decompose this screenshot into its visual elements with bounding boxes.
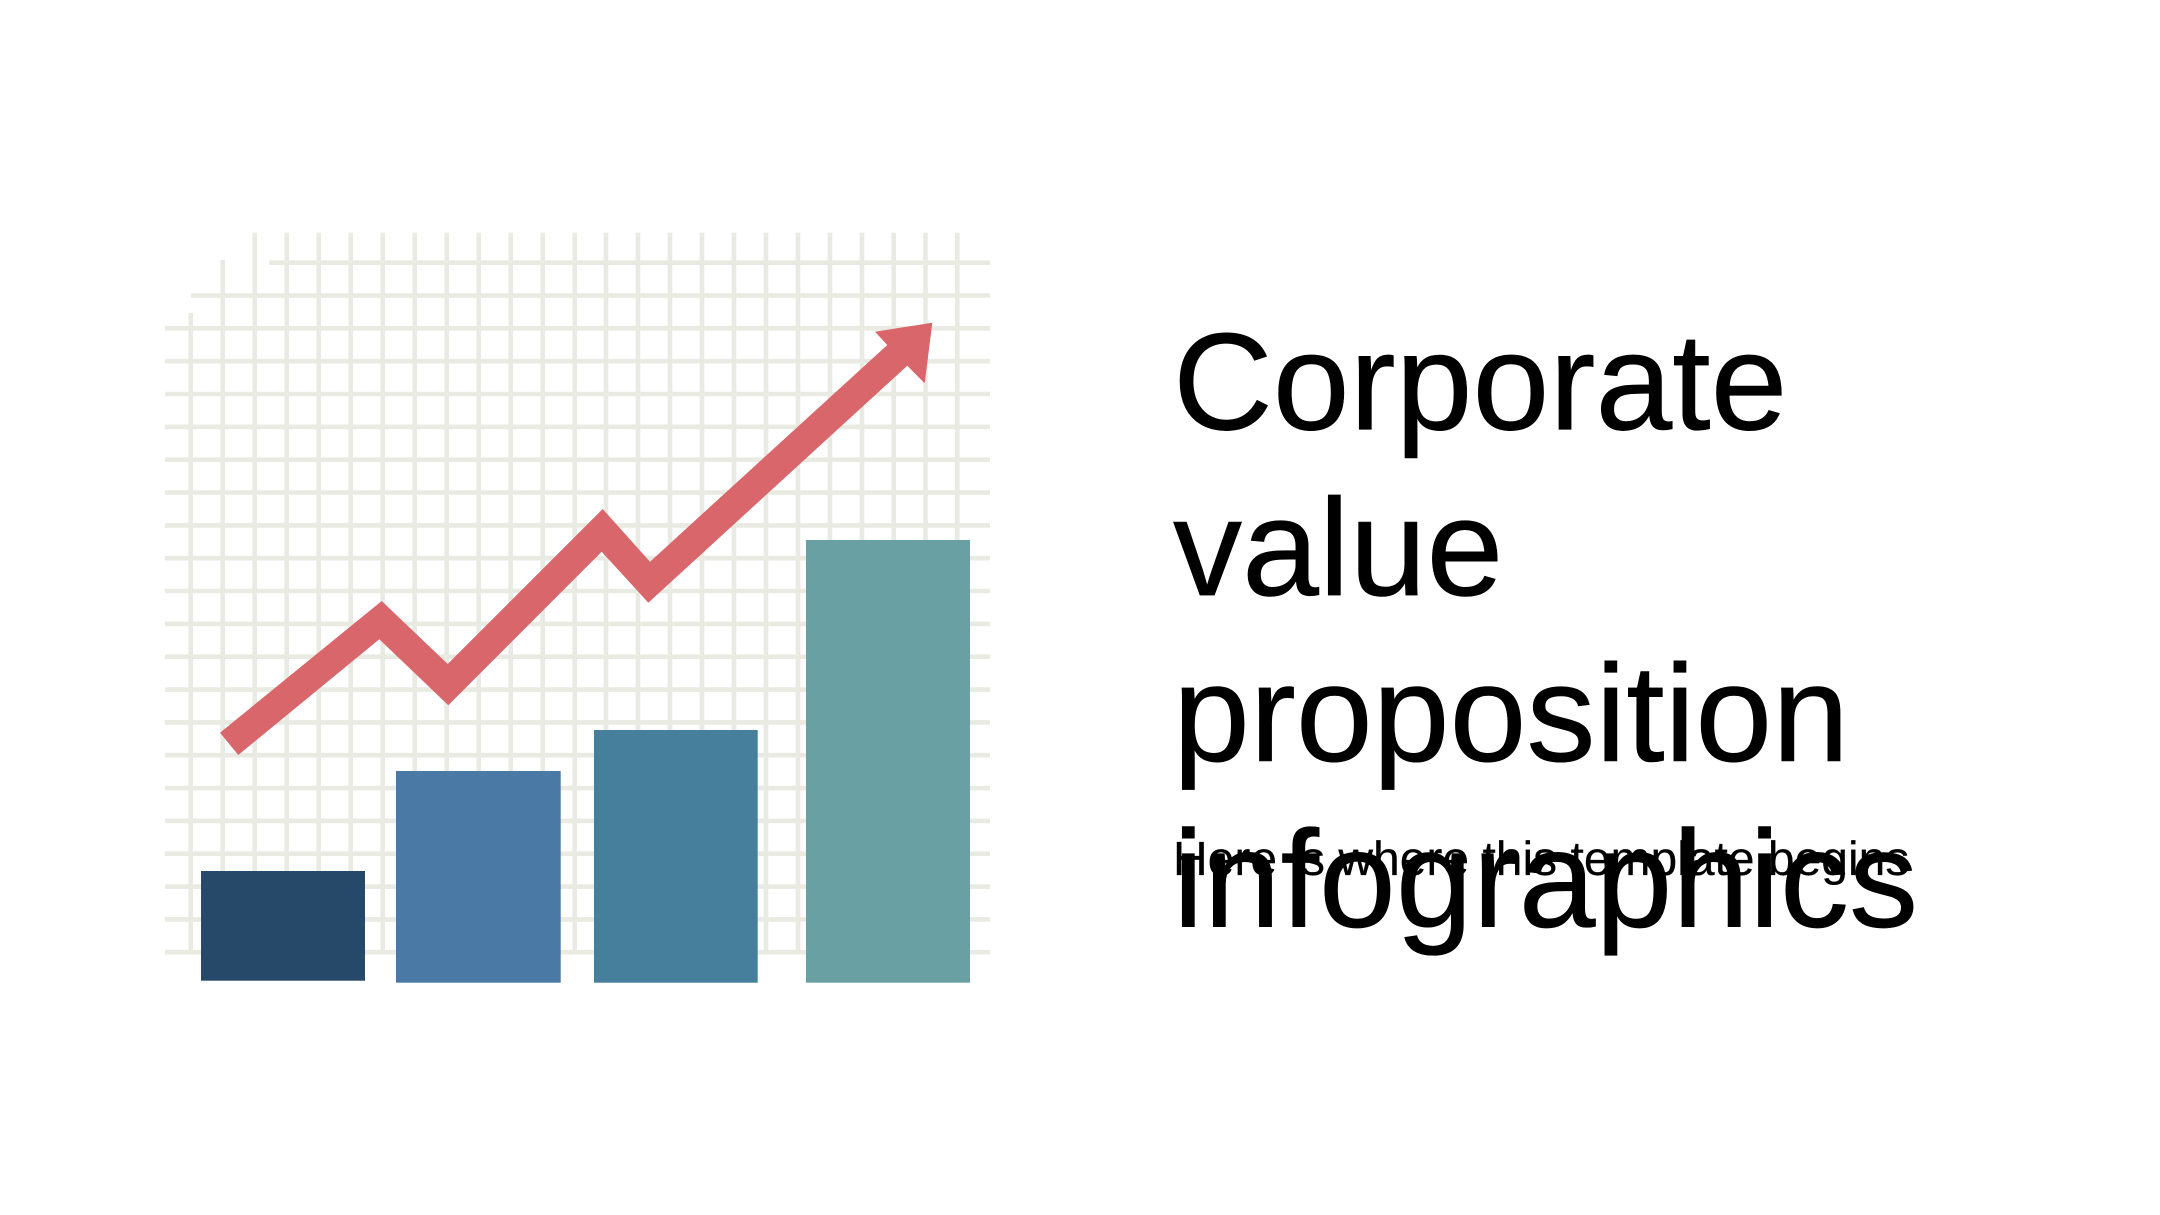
title: infographics [1173,803,1918,957]
bar 4 [806,540,970,983]
grid background [165,233,990,952]
title: Corporate [1173,305,1788,459]
chart illustration [165,233,990,983]
bar 2 [396,771,561,983]
title: proposition [1173,637,1849,791]
title: value [1173,471,1503,625]
bar 1 [201,871,365,981]
rising arrow [220,323,932,755]
subtitle: Here is where this template begins [1173,833,1909,886]
bar 3 [594,730,758,983]
